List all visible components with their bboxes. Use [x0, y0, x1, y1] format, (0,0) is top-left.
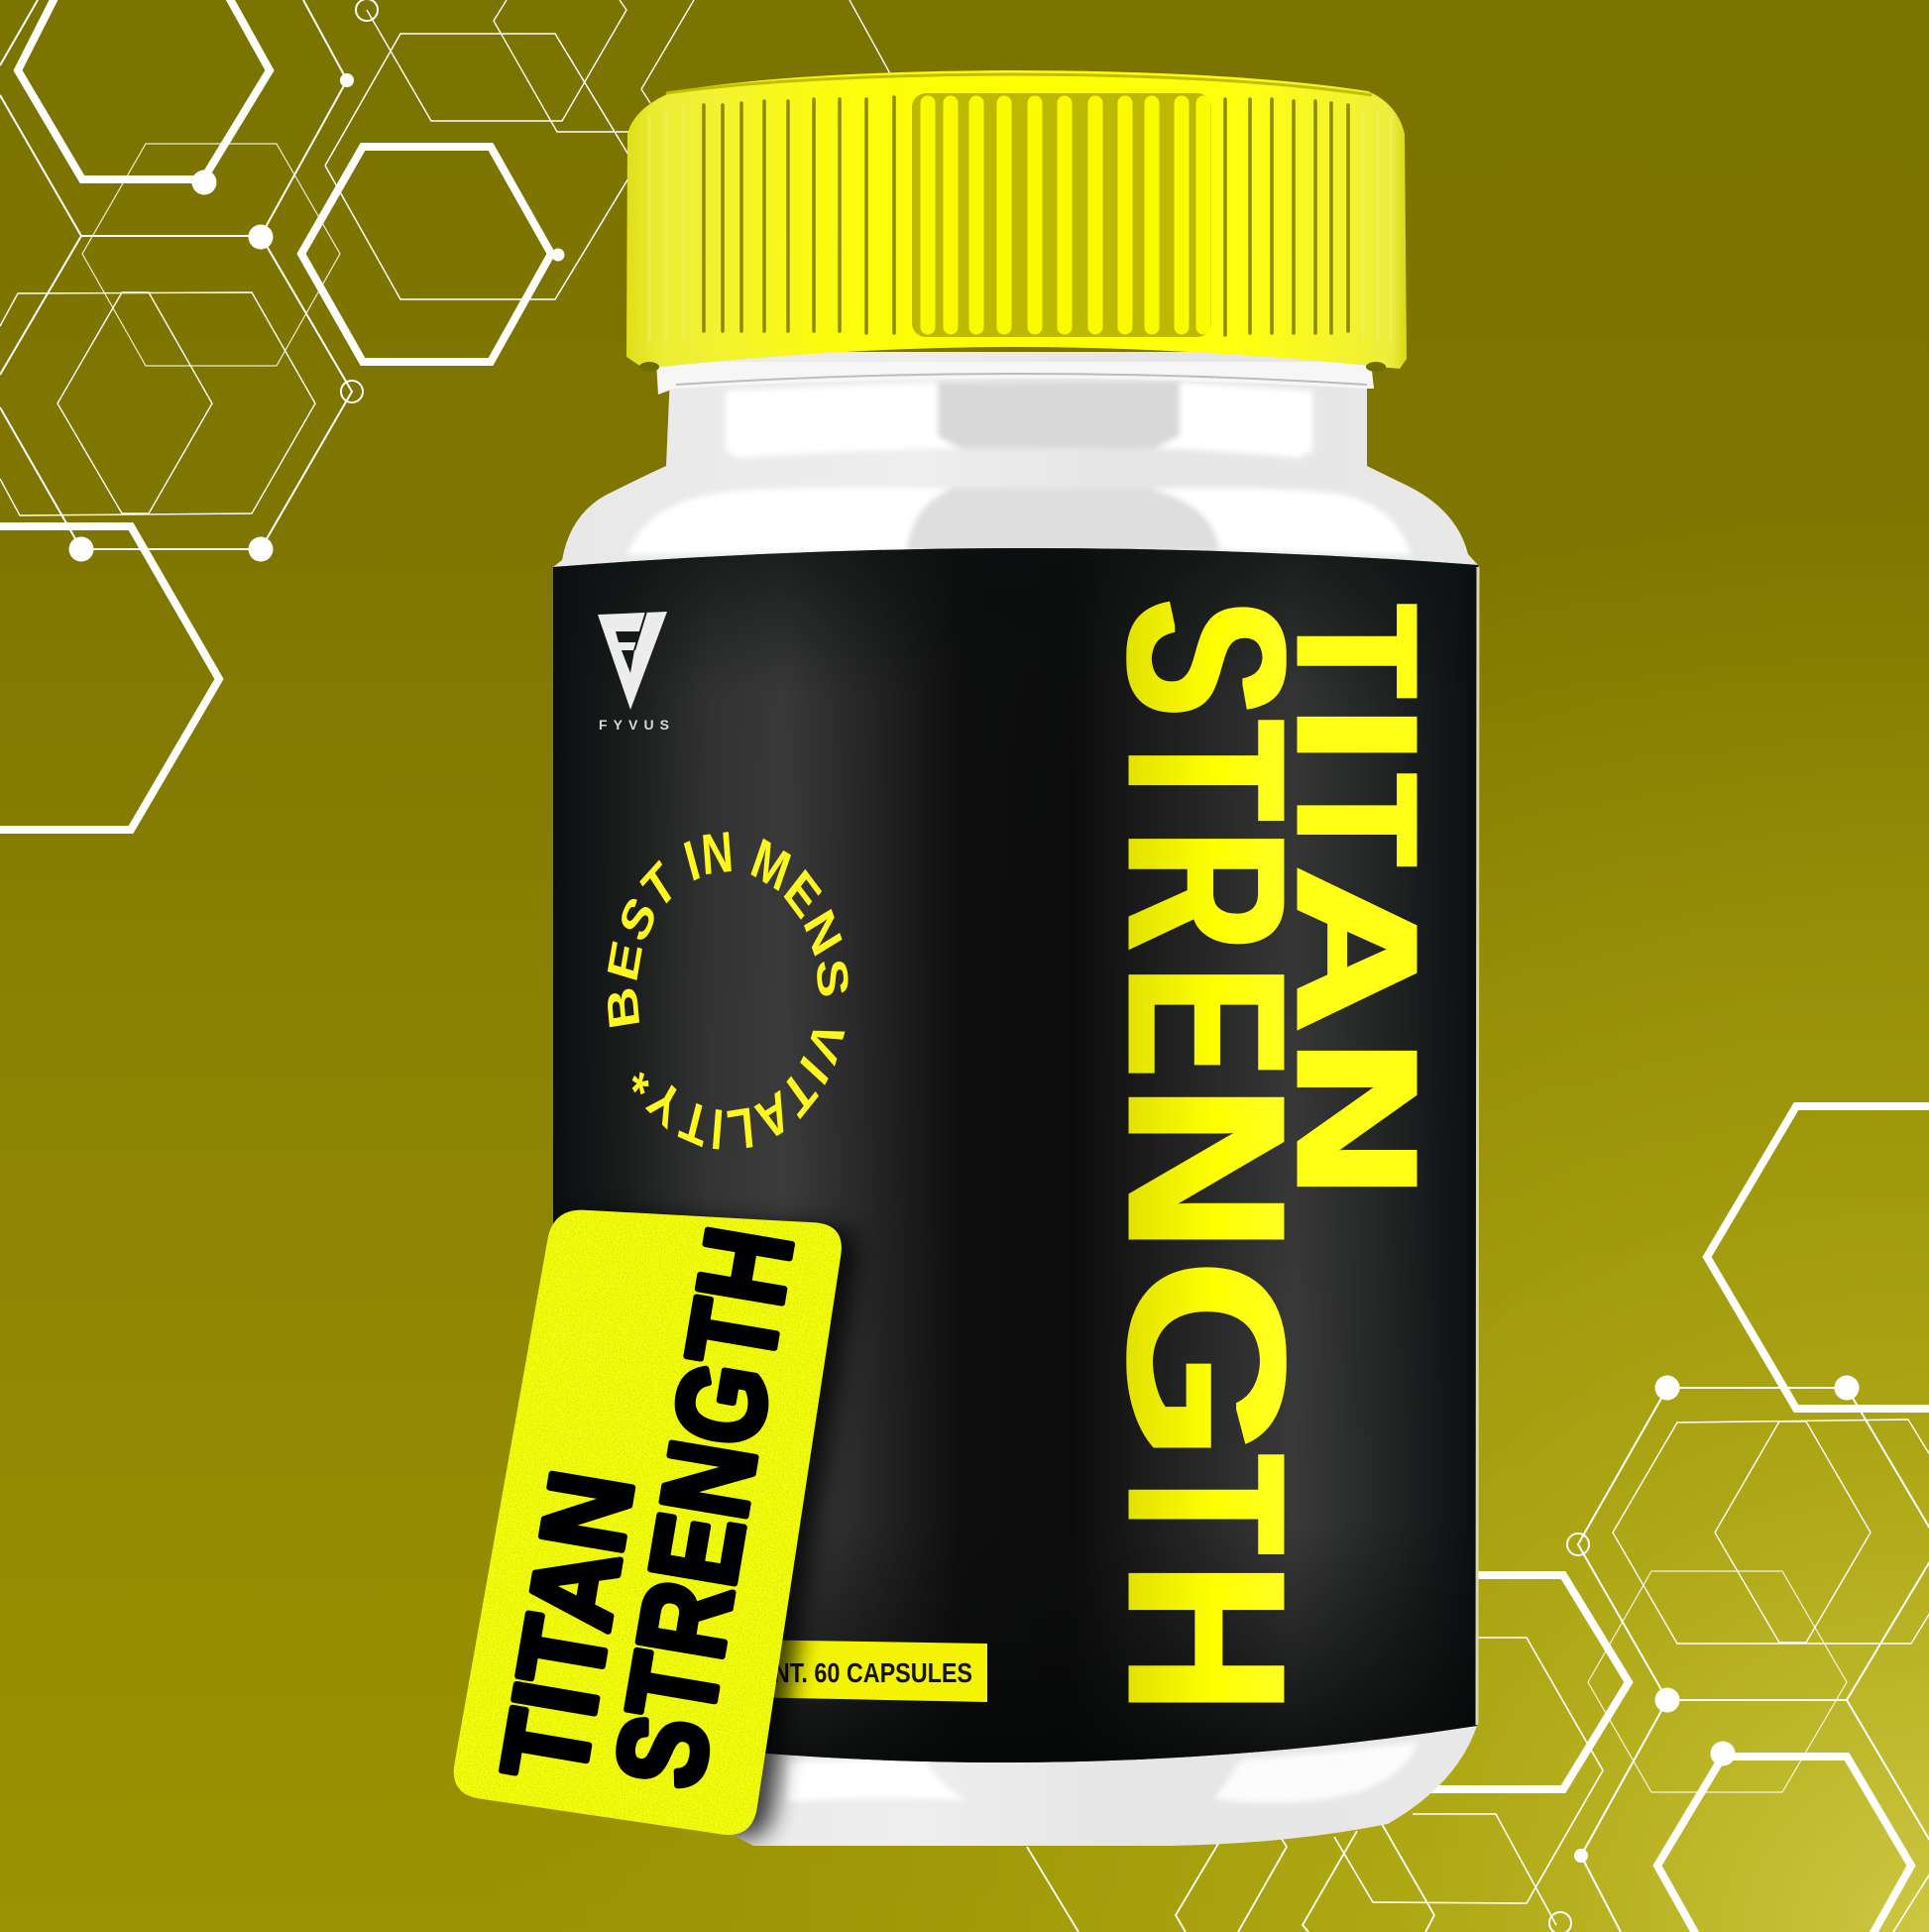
capsule count tag	[743, 1640, 987, 1702]
brand logo	[598, 612, 669, 733]
sticker card	[446, 1204, 848, 1844]
title: TITAN: T	[1261, 776, 1454, 863]
title: STRENGTH: H	[1080, 1562, 1331, 1713]
bottle body white plastic	[553, 352, 1478, 1846]
sticker shadow	[617, 1210, 862, 1846]
capsule count tag: CNT. 60 CAPSULES	[756, 1657, 972, 1688]
hexagon network: top left	[0, 0, 892, 830]
title: STRENGTH: N	[1081, 1085, 1332, 1252]
label wrap	[553, 548, 1478, 1762]
title: STRENGTH: R	[1080, 831, 1331, 950]
cap	[626, 70, 1407, 372]
bottle	[553, 70, 1479, 1846]
title: TITAN: I	[1261, 709, 1454, 761]
title: STRENGTH	[1080, 600, 1333, 1713]
sticker text: TITAN: TITAN	[477, 1463, 659, 1789]
title: TITAN	[1260, 607, 1454, 1196]
title: STRENGTH: T	[1080, 1456, 1333, 1552]
sticker text: STRENGTH: STRENGTH	[591, 1218, 819, 1797]
title: STRENGTH: T	[1081, 722, 1332, 820]
title: STRENGTH: S	[1081, 600, 1333, 716]
title: STRENGTH: E	[1080, 966, 1331, 1077]
title: TITAN: T	[1260, 607, 1453, 695]
hexagon network: bottom right	[1027, 1106, 1929, 1932]
brand logo: FYVUS	[599, 717, 669, 733]
title: TITAN: A	[1260, 866, 1453, 1032]
circular slogan: BEST IN MENS VITALITY*	[607, 832, 849, 1150]
title: STRENGTH: G	[1081, 1260, 1332, 1460]
title: TITAN: N	[1261, 1041, 1454, 1196]
